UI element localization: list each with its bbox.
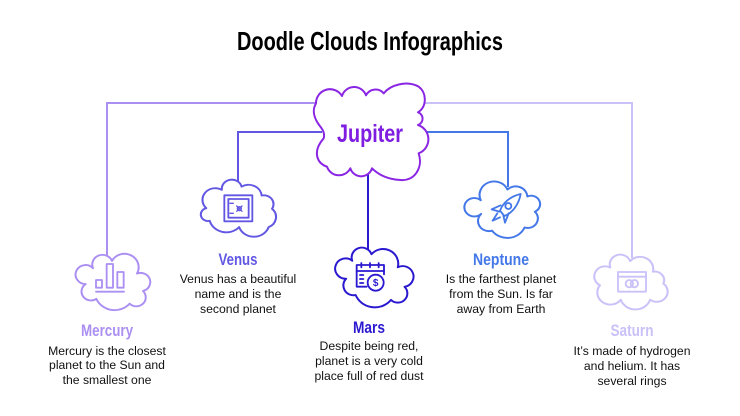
panel: Venus: second planet: [200, 302, 277, 316]
panel: Neptune: away from Earth: [457, 302, 545, 316]
panel: Mars: place full of red dust: [314, 369, 424, 383]
panel: Saturn: and helium. It has: [584, 359, 680, 373]
panel: Mars: planet is a very cold: [315, 354, 423, 368]
panel: Mercury: the smallest one: [63, 373, 152, 387]
cloud: Jupiter: [314, 84, 428, 180]
cloud: Jupiter: Jupiter: [337, 120, 403, 148]
panel: Venus: Venus has a beautiful: [180, 272, 296, 286]
panel: Saturn: It’s made of hydrogen: [574, 344, 690, 358]
cloud with bar chart icon: [76, 254, 150, 310]
panel: Mars: Despite being red,: [320, 339, 418, 353]
connector: Saturn: [420, 103, 632, 258]
cloud with calendar icon: $: [373, 278, 379, 289]
panel: Neptune: from the Sun. Is far: [449, 287, 553, 301]
panel: Neptune: Neptune: [473, 250, 529, 269]
cloud with safe icon: [201, 180, 276, 237]
panel: Venus: name and is the: [195, 287, 282, 301]
panel: Venus: [180, 180, 296, 316]
cloud with card icon: [594, 255, 668, 309]
panel: Saturn: Saturn: [610, 321, 654, 340]
connector: Neptune: [426, 132, 508, 187]
connector: Mercury: [107, 103, 316, 258]
panel: Saturn: several rings: [597, 374, 667, 388]
panel: Venus: Venus: [218, 250, 258, 269]
connector: Venus: [238, 132, 322, 184]
panel: Mars: [314, 248, 424, 383]
title: Doodle Clouds Infographics: [237, 26, 503, 56]
connector: Mars: [367, 166, 369, 256]
panel: Neptune: Is the farthest planet: [446, 272, 557, 286]
panel: Mercury: Mercury: [81, 321, 133, 340]
panel: Mars: Mars: [353, 318, 385, 337]
panel: Mercury: [48, 254, 167, 387]
panel: Mercury: Mercury is the closest: [48, 344, 167, 358]
cloud with rocket icon: [464, 181, 540, 238]
panel: Neptune: [446, 181, 557, 316]
panel: Mercury: planet to the Sun and: [49, 358, 165, 372]
panel: Saturn: [574, 255, 690, 388]
